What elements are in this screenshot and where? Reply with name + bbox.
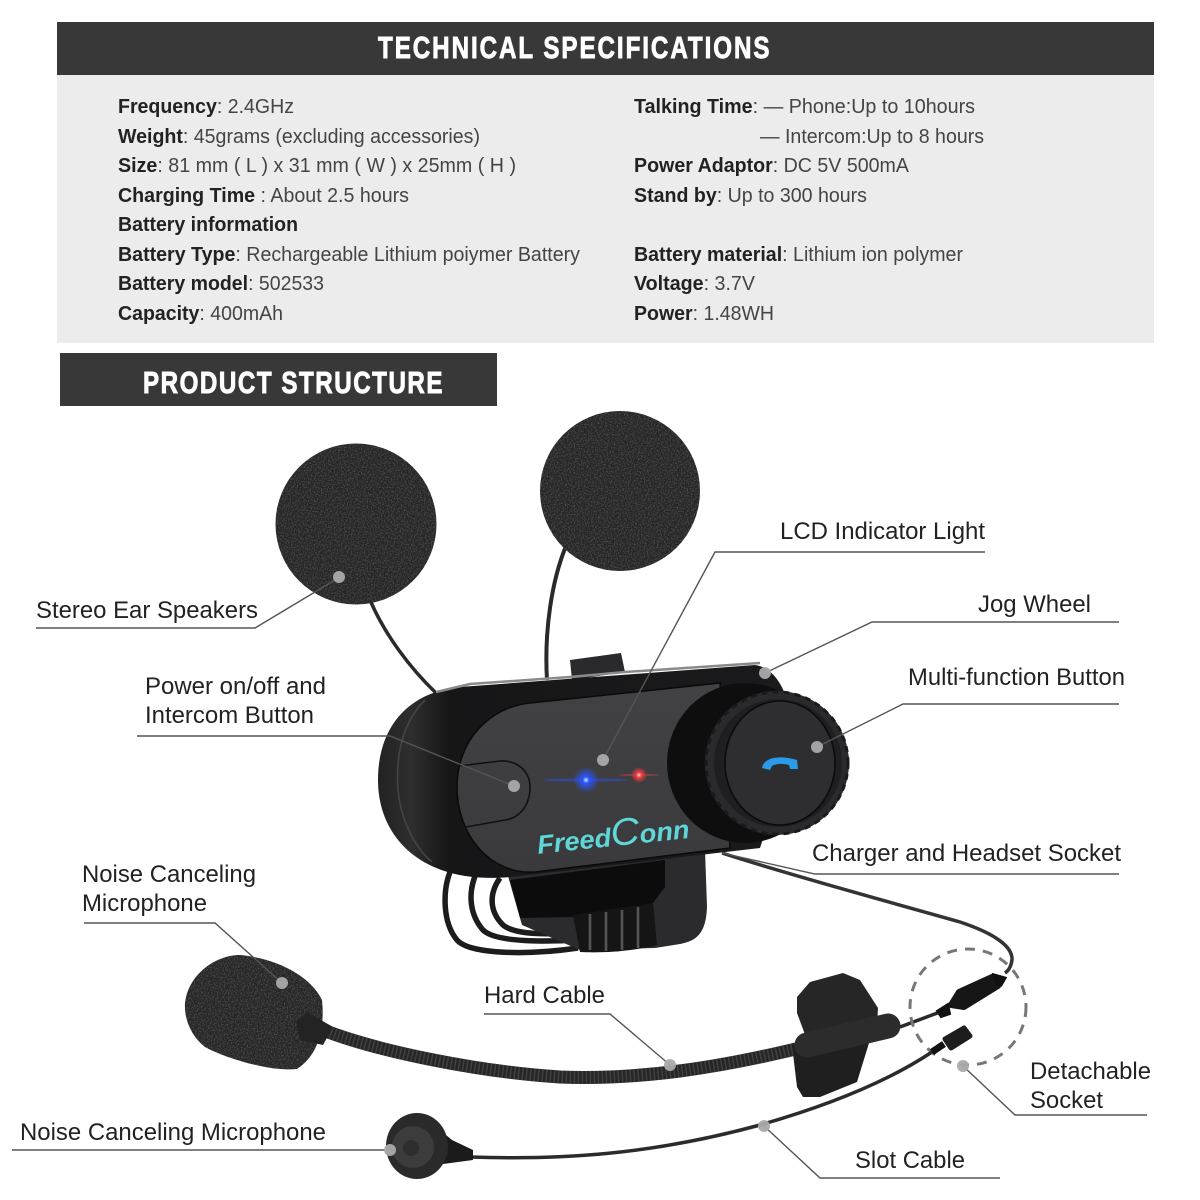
foam windscreen — [185, 955, 323, 1069]
callout: stereo ear speakers: Stereo Ear Speakers — [36, 597, 258, 624]
callout: LCD indicator light: LCD Indicator Light — [780, 518, 985, 545]
heading bar: technical specifications: TECHNICAL SPECIFICATIONS — [378, 30, 770, 65]
panel: technical specifications — [57, 22, 1154, 343]
cable loops — [445, 872, 578, 953]
mounting plate — [508, 850, 707, 950]
spec list: left column: Battery Type: Rechargeable Lithium poiymer Battery — [118, 244, 580, 266]
illustration: intercom headset unit — [378, 653, 849, 953]
callout: noise canceling microphone, button — [12, 1119, 396, 1156]
spec list: left column: Frequency: 2.4GHz — [118, 96, 294, 118]
spec list: right column: Stand by: Up to 300 hours — [634, 185, 867, 207]
body — [378, 665, 795, 878]
spec list: left column: Battery model: 502533 — [118, 273, 324, 295]
callout: hard cable — [484, 982, 676, 1071]
gooseneck — [323, 1030, 812, 1077]
spec list: left column: Capacity: 400mAh — [118, 303, 283, 325]
logo: FreedConn — [535, 805, 691, 863]
illustration: slot cable with button microphone — [386, 1028, 970, 1179]
spec list: left column: Weight: 45grams (excluding accessories) — [118, 126, 480, 148]
callout: jog wheel: Jog Wheel — [978, 591, 1091, 618]
power button outline — [459, 761, 530, 827]
spec list: left column: Battery information — [118, 214, 298, 236]
icon: right ear speaker with wire — [540, 411, 700, 680]
callout: slot cable: Slot Cable — [855, 1147, 965, 1174]
icon: left ear speaker with wire — [276, 444, 436, 693]
spec list: left column: Charging Time : About 2.5 hours — [118, 185, 409, 207]
strain relief — [573, 903, 657, 952]
heading bar: technical specifications — [57, 22, 1154, 75]
callout: power button — [137, 673, 520, 792]
callout: LCD indicator light — [597, 518, 985, 766]
callout: multi-function button — [811, 664, 1125, 753]
button microphone — [440, 1130, 473, 1164]
callout: detachable socket: Detachable — [1030, 1058, 1151, 1085]
callout: noise canceling microphone, boom: Noise Canceling — [82, 861, 256, 888]
illustration: detachable connector and cable to the unit — [722, 853, 1026, 1065]
callout: hard cable: Hard Cable — [484, 982, 605, 1009]
callout: power button: Intercom Button — [145, 702, 314, 729]
mic collar — [296, 1012, 333, 1045]
callout: noise canceling microphone, boom: Microphone — [82, 890, 207, 917]
spec list: right column: Power: 1.48WH — [634, 303, 774, 325]
callout: stereo ear speakers — [36, 571, 345, 628]
spec list: left column: Size: 81 mm ( L ) x 31 mm ( W ) x 25mm ( H ) — [118, 155, 516, 177]
callout: detachable socket: Socket — [1030, 1087, 1103, 1114]
spec list: right column: Talking Time: — Phone:Up to 10hours — [634, 96, 975, 118]
indicator lights — [544, 767, 659, 793]
callout: noise canceling microphone, button: Noise Canceling Microphone — [20, 1119, 326, 1146]
callout: noise canceling microphone, boom — [82, 861, 288, 989]
icon: phone handset — [762, 757, 798, 770]
callout: power button: Power on/off and — [145, 673, 326, 700]
callout: slot cable — [758, 1120, 1000, 1178]
callout: multi-function button: Multi-function Button — [908, 664, 1125, 691]
spec list: right column: Battery material: Lithium ion polymer — [634, 244, 963, 266]
callout: detachable socket — [957, 1058, 1151, 1115]
spec list: right column: — Intercom:Up to 8 hours — [760, 126, 984, 148]
knob — [667, 683, 823, 843]
spec list: right column: Voltage: 3.7V — [634, 273, 756, 295]
spec list: left column — [118, 96, 580, 325]
heading bar: product structure — [60, 353, 497, 406]
connector cable — [900, 1012, 940, 1027]
spec list: right column — [634, 96, 984, 325]
callout: charger and headset socket: Charger and Headset Socket — [812, 840, 1121, 867]
dashed circle — [910, 949, 1026, 1065]
clip — [792, 1030, 873, 1097]
spec list: right column: Power Adaptor: DC 5V 500mA — [634, 155, 910, 177]
illustration: boom microphone with hard cable — [185, 955, 940, 1097]
heading bar: product structure: PRODUCT STRUCTURE — [143, 365, 443, 400]
callout: jog wheel — [759, 591, 1119, 679]
top clip — [570, 653, 625, 680]
front panel — [457, 683, 730, 872]
callout: charger and headset socket — [722, 840, 1121, 874]
